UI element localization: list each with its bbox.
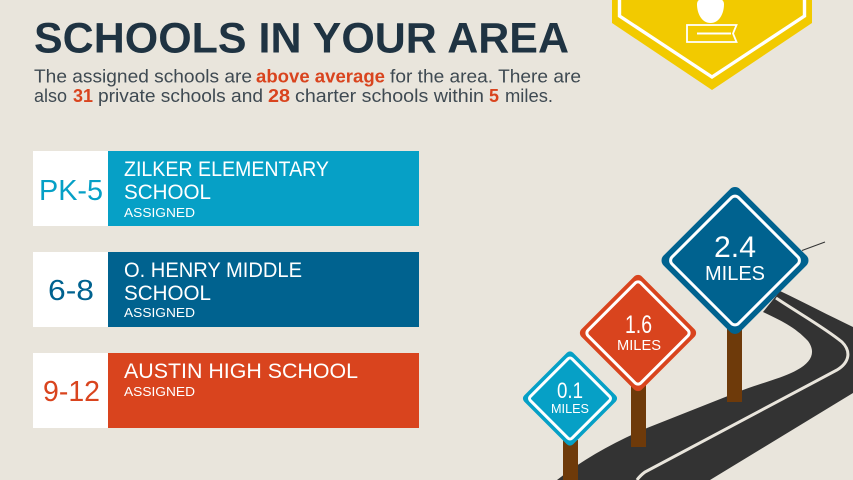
panel: high school row xyxy=(33,353,419,428)
panel: elementary school row: PK-5 xyxy=(39,175,103,207)
intro text block: charter schools within xyxy=(295,85,484,106)
sign: 0.1 miles: 0.1 xyxy=(557,378,583,403)
sign: 1.6 miles: MILES xyxy=(617,337,661,354)
intro text block: for the area. There are xyxy=(390,66,581,86)
intro text block xyxy=(34,66,581,106)
panel: high school row: ASSIGNED xyxy=(124,384,195,399)
panel: high school row: 9-12 xyxy=(43,376,100,408)
panel: middle school row: SCHOOL xyxy=(124,282,211,305)
badge: yellow school shield xyxy=(612,0,812,90)
intro text block: miles. xyxy=(505,85,553,106)
icon: apple on book xyxy=(687,0,736,42)
intro text block: 5 xyxy=(489,85,499,106)
road illustration xyxy=(557,242,853,480)
panel: middle school row xyxy=(33,252,419,327)
panel: middle school row: O. HENRY MIDDLE xyxy=(124,259,302,282)
intro text block: also xyxy=(34,85,67,106)
sign: 2.4 miles xyxy=(659,184,811,402)
intro text block: private schools and xyxy=(98,85,263,106)
panel: elementary school row: ZILKER ELEMENTARY xyxy=(124,158,329,181)
intro text block: 31 xyxy=(73,85,93,106)
panel: middle school row: 6-8 xyxy=(48,275,94,307)
panel: elementary school row: ASSIGNED xyxy=(124,205,195,220)
sign: 2.4 miles: MILES xyxy=(705,263,765,285)
sign: 1.6 miles: 1.6 xyxy=(625,311,652,339)
panel: high school row: AUSTIN HIGH SCHOOL xyxy=(124,360,358,383)
intro text block: 28 xyxy=(268,85,290,106)
intro text block: above average xyxy=(256,66,385,86)
panel: middle school row: ASSIGNED xyxy=(124,305,195,320)
title: SCHOOLS IN YOUR AREA xyxy=(34,14,569,62)
sign: 0.1 miles: MILES xyxy=(551,401,589,416)
panel: elementary school row xyxy=(33,151,419,226)
intro text block: The assigned schools are xyxy=(34,66,252,86)
sign: 2.4 miles: 2.4 xyxy=(714,231,756,264)
sign: 0.1 miles xyxy=(521,350,619,480)
panel: elementary school row: SCHOOL xyxy=(124,181,211,204)
sign: 1.6 miles xyxy=(578,273,698,447)
